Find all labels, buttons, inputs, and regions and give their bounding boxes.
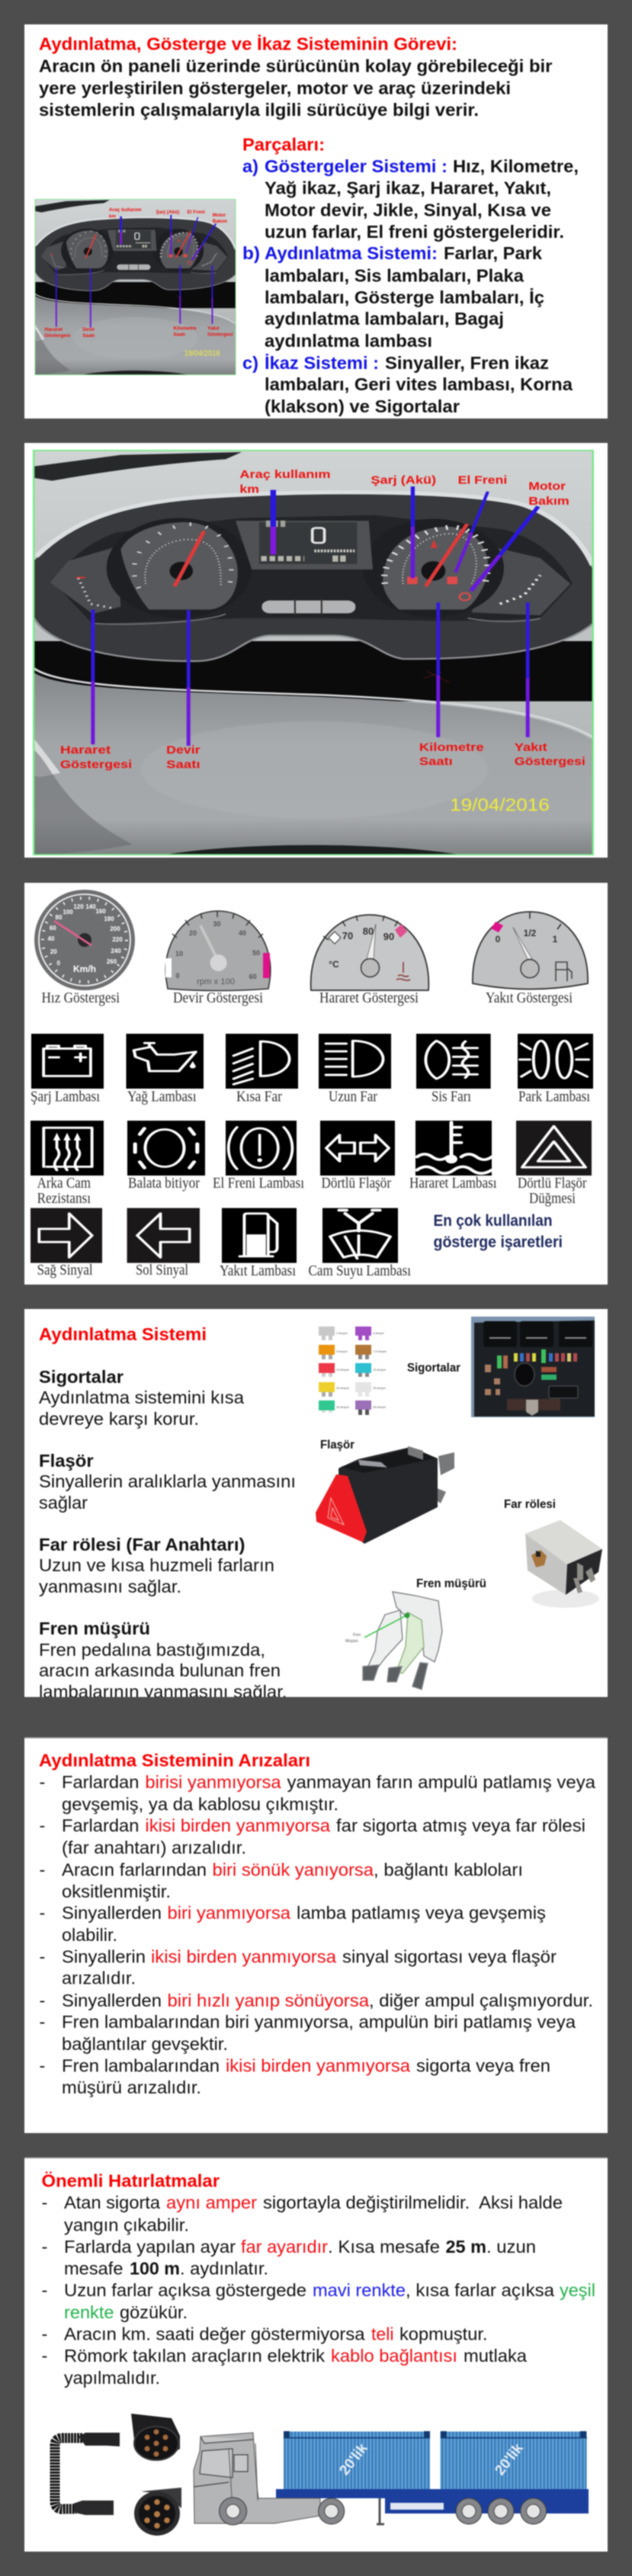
gauge: fuel: 1/2	[524, 928, 537, 938]
list: faults: Sinyallerin	[62, 1946, 146, 1966]
panel: system purpose and parts	[24, 24, 608, 419]
list: faults: , diğer ampul çalışmıyordur.	[369, 1991, 593, 2010]
list: faults: ikisi birden yanmıyorsa	[226, 2056, 411, 2076]
labels: lower callouts: Hararet	[60, 743, 111, 756]
container labels: 20'lik	[336, 2440, 371, 2478]
gauge: speedometer: 80	[56, 914, 63, 921]
image: fuse box	[471, 1317, 595, 1417]
list: faults: biri hızlı yanıp sönüyorsa	[168, 1991, 370, 2010]
list: reminders: kablo bağlantısı	[331, 2346, 457, 2366]
row 2 captions: Düğmesi	[529, 1190, 576, 1207]
text block: flasher: Flaşör	[39, 1451, 94, 1471]
text block: headlight relay: Far rölesi (Far Anahtarı)	[39, 1535, 245, 1554]
text block: brake switch: Fren müşürü	[39, 1618, 150, 1638]
gauge: temperature: 90	[383, 931, 394, 942]
text block: parts a: Yağ ikaz, Şarj ikaz, Hararet, Yakıt,	[265, 178, 551, 198]
row 2 captions: Arka Cam	[37, 1175, 91, 1192]
text block: brake switch	[39, 1618, 287, 1702]
list: reminders: . aydınlatır.	[180, 2259, 268, 2279]
list: faults: birisi yanmıyorsa	[145, 1772, 282, 1792]
row 1 captions: Kısa Far	[236, 1089, 282, 1105]
list: faults: Sinyallerden	[62, 1903, 162, 1923]
gauge: speedometer	[34, 890, 135, 990]
gauge captions: Hız Göstergesi	[41, 990, 120, 1006]
list: reminders: Farlarda yapılan ayar	[64, 2237, 236, 2257]
list: reminders: aynı amper	[166, 2193, 257, 2212]
gauge: fuel: 1	[553, 934, 558, 945]
icon: washer fluid	[322, 1208, 398, 1263]
list: reminders: mutlaka	[464, 2346, 528, 2366]
text block: headlight relay	[39, 1535, 274, 1596]
list: reminders: mavi renkte	[313, 2280, 406, 2300]
list: faults: arızalıdır.	[62, 1968, 136, 1988]
list: faults: -	[40, 1903, 45, 1923]
image: fuse chart: 7,5 Amper	[373, 1349, 387, 1353]
gauge: tachometer: rpm x 100	[197, 977, 235, 986]
panel: lighting system	[24, 1309, 608, 1702]
gauge: speedometer: 20	[50, 948, 57, 955]
row 1 captions	[30, 1089, 590, 1105]
text block: headlight relay: Uzun ve kısa huzmeli farların	[39, 1555, 274, 1575]
gauge: speedometer: 200	[110, 925, 120, 932]
gauge: tachometer: 0	[175, 972, 180, 980]
dashboard photo with labels	[33, 450, 594, 855]
list: reminders: yapılmalıdır.	[64, 2368, 160, 2388]
image: container truck	[194, 2431, 589, 2525]
row 3 captions: Sol Sinyal	[136, 1262, 188, 1278]
list: faults: ikisi birden yanmıyorsa	[145, 1816, 331, 1836]
labels: upper callouts	[239, 467, 569, 507]
row 2 captions: Rezistansı	[37, 1190, 91, 1207]
icon: hazard triangle	[516, 1121, 592, 1176]
heading: parts: Parçaları:	[242, 134, 325, 154]
row 3 captions: Sağ Sinyal	[37, 1262, 93, 1278]
list: reminders: mesafe	[64, 2259, 124, 2279]
image: hazard flasher switch	[316, 1446, 454, 1544]
list: faults: -	[40, 1816, 45, 1836]
list: reminders: Atan sigorta	[64, 2193, 161, 2212]
icon: hazard arrows	[320, 1121, 395, 1176]
small dashboard photo: Şarj (Akü)	[156, 210, 179, 215]
text block: brake switch: Fren pedalına bastığımızda,	[39, 1640, 265, 1660]
gauge: speedometer: 60	[50, 925, 56, 932]
small dashboard photo: Araç kullanım	[109, 207, 142, 213]
gauge: speedometer: 260	[107, 958, 117, 965]
row 2 captions: Dörtlü Flaşör	[518, 1175, 587, 1192]
text block: fuses: devreye karşı korur.	[39, 1409, 199, 1429]
row 2 captions: Dörtlü Flaşör	[322, 1175, 391, 1192]
list: reminders: yangın çıkabilir.	[64, 2215, 189, 2235]
list: reminders: yeşil	[560, 2280, 595, 2300]
text block: parts b: b)	[242, 243, 260, 263]
gauge: speedometer: Km/h	[73, 964, 96, 974]
image: fuse chart: 2 Amper	[336, 1331, 348, 1335]
heading: reminders: Önemli Hatırlatmalar	[41, 2171, 220, 2191]
icon: right turn signal	[30, 1208, 102, 1263]
image: pedal assembly: Fren	[353, 1633, 361, 1638]
photo date stamp: 19/04/2016	[450, 795, 550, 815]
text block: fuses	[39, 1367, 245, 1429]
small dashboard photo: 19/04/2016	[184, 349, 220, 358]
gauge captions: Devir Göstergesi	[173, 990, 263, 1006]
text block: parts c: İkaz Sistemi :	[265, 353, 379, 373]
gauge: speedometer: 220	[112, 936, 123, 943]
list: faults: ikisi birden yanmıyorsa	[151, 1946, 337, 1966]
gauge: speedometer: 160	[95, 908, 106, 915]
row 1 captions: Yağ Lambası	[127, 1089, 197, 1105]
gauge: tachometer: 30	[213, 920, 221, 928]
image: coiled trailer cable	[55, 2433, 120, 2515]
text block: parts a: Göstergeler Sistemi :	[265, 156, 448, 176]
row 3 captions: Yakıt Lambası	[220, 1262, 296, 1279]
list: faults: -	[40, 2012, 45, 2032]
icon: parking brake	[226, 1121, 297, 1176]
icon: left turn signal	[127, 1208, 200, 1263]
row 3 captions	[37, 1262, 411, 1279]
list: reminders: teli	[371, 2324, 393, 2343]
list: faults: -	[40, 1772, 45, 1792]
labels: lower callouts: Saatı	[166, 757, 201, 771]
small dashboard photo: Hararet	[44, 327, 63, 332]
gauge: tachometer: 20	[189, 929, 197, 937]
small dashboard photo: Saatı	[173, 332, 185, 337]
list: reminders: Römork takılan araçların elektrik	[64, 2346, 325, 2366]
icon: fuel pump	[222, 1208, 297, 1263]
text block: parts b: Farlar, Park	[444, 243, 543, 263]
labels: upper callouts: El Freni	[458, 473, 507, 486]
row 1 captions: Uzun Far	[329, 1089, 377, 1105]
icon: coolant temperature	[415, 1121, 492, 1176]
list: reminders: , kısa farlar açıksa	[406, 2280, 555, 2300]
small dashboard photo: Bakım	[213, 220, 227, 224]
small dashboard photo: Devir	[82, 327, 95, 332]
text block: parts c: (klakson) ve Sigortalar	[265, 396, 460, 416]
small dashboard photo: Motor	[213, 213, 226, 218]
text block: parts a: uzun farlar, El freni göstergeleridir.	[265, 222, 564, 242]
list: reminders: -	[41, 2346, 47, 2366]
gauge: temperature: °C	[329, 959, 339, 970]
gauge: speedometer: 0	[56, 960, 60, 967]
labels: lower callouts: Yakıt	[515, 740, 547, 753]
row 2 captions	[37, 1175, 587, 1207]
gauge: fuel: 0	[496, 934, 501, 945]
panel: large dashboard photo	[24, 443, 608, 858]
list: faults: müşürü arızalıdır.	[62, 2077, 201, 2097]
small dashboard photo: Saatı	[82, 334, 95, 338]
list: faults: Sinyallerden	[62, 1991, 162, 2010]
text block: headlight relay: yanmasını sağlar.	[39, 1577, 181, 1596]
row 1 captions: Park Lambası	[518, 1089, 590, 1105]
list: faults: sinyal sigortası veya flaşör	[342, 1946, 557, 1966]
list: reminders: 100 m	[130, 2259, 180, 2279]
gauge captions: Yakıt Göstergesi	[486, 990, 573, 1006]
callout: most used indicators: gösterge işaretleri	[433, 1233, 563, 1251]
image: socket top	[131, 2414, 180, 2460]
gauge captions	[41, 990, 573, 1006]
label: flasher: Flaşör	[320, 1439, 354, 1452]
small dashboard photo	[35, 199, 236, 375]
labels: lower callouts: Göstergesi	[515, 755, 585, 768]
list: faults: -	[40, 2056, 45, 2076]
container labels: 20'lik	[492, 2440, 527, 2478]
image: fuse chart: 35 Amper	[373, 1405, 387, 1409]
text block: system description: sistemlerin çalışmalarıyla ilgili sürücüye bilgi verir.	[39, 100, 479, 120]
image: fuse chart: 20 Amper	[336, 1386, 350, 1390]
text block: system description	[39, 56, 552, 120]
gauge: tachometer: 60	[249, 973, 257, 980]
text block: parts b: lambaları, Sis lambaları, Plaka	[265, 265, 525, 285]
list: reminders: -	[41, 2324, 47, 2343]
small dashboard photo: Kilometre	[173, 326, 197, 331]
list: faults: -	[40, 1946, 45, 1966]
list: faults: Farlardan	[62, 1816, 139, 1836]
list: reminders: far ayarıdır	[241, 2237, 328, 2257]
text block: parts a	[242, 156, 579, 242]
text block: parts c: lambaları, Geri vites lambası, Korna	[265, 374, 573, 394]
list: faults: oksitlenmiştir.	[62, 1881, 171, 1901]
list: faults: Fren lambalarından	[62, 2056, 220, 2076]
icon: oil	[127, 1034, 204, 1089]
list: faults: -	[40, 1991, 45, 2010]
image: pedal assembly	[345, 1592, 442, 1689]
small dashboard photo: Göstergesi	[207, 332, 233, 337]
gauge: temperature: 80	[363, 925, 374, 937]
list: reminders: sigortayla değiştirilmelidir. Aksi halde	[263, 2193, 563, 2212]
gauge: tachometer: 10	[175, 950, 183, 958]
list: faults: Fren lambalarından biri yanmıyorsa, ampulün biri patlamış veya	[62, 2012, 576, 2032]
small dashboard photo: Yakıt	[207, 326, 220, 331]
list: faults: -	[40, 1860, 45, 1880]
image: fuse chart	[319, 1326, 387, 1415]
labels: lower callouts: Göstergesi	[60, 757, 132, 771]
icon: low beam	[226, 1034, 298, 1089]
label: fuses: Sigortalar	[407, 1362, 460, 1375]
labels: lower callouts	[60, 740, 585, 771]
callout: most used indicators	[433, 1212, 563, 1251]
text block: parts a: Hız, Kilometre,	[453, 156, 579, 176]
list: faults: biri sönük yanıyorsa	[212, 1860, 374, 1880]
text block: parts b: aydınlatma lambası	[265, 331, 432, 351]
text block: fuses: Sigortalar	[39, 1367, 124, 1387]
text block: flasher	[39, 1451, 296, 1513]
icon: parking lights	[518, 1034, 593, 1089]
gauge: speedometer: 180	[104, 916, 114, 922]
labels: lower callouts: Kilometre	[419, 740, 484, 753]
image: relay	[525, 1520, 602, 1608]
list: reminders: . Kısa mesafe	[328, 2237, 440, 2257]
gauge: tachometer: 40	[239, 929, 246, 937]
list: faults: (far anahtarı) arızalıdır.	[62, 1837, 246, 1857]
text block: system description: Aracın ön paneli üzerinde sürücünün kolay görebileceği bir	[39, 56, 552, 76]
text block: parts c: c)	[242, 353, 258, 373]
labels: upper callouts: km	[239, 482, 259, 496]
text block: parts a: a)	[242, 156, 258, 176]
gauge: speedometer: 100	[63, 909, 73, 916]
gauge captions: Hararet Göstergesi	[319, 990, 419, 1006]
label: brake switch: Fren müşürü	[416, 1577, 486, 1590]
text block: fuses: Aydınlatma sistemini kısa	[39, 1387, 245, 1407]
text block: system description: yere yerleştirilen göstergeler, motor ve araç üzerindeki	[39, 79, 511, 98]
image: pedal assembly: Müşürü	[345, 1639, 358, 1644]
labels: upper callouts: Araç kullanım	[239, 467, 330, 480]
text block: parts a: Motor devir, Jikle, Sinyal, Kısa ve	[265, 200, 551, 220]
list: reminders: -	[41, 2237, 47, 2257]
list: faults: olabilir.	[62, 1925, 117, 1945]
list: faults: far sigorta atmış veya far rölesi	[336, 1816, 585, 1836]
small dashboard photo: km	[109, 214, 116, 219]
labels: upper callouts: Bakım	[528, 494, 569, 507]
gauge: speedometer: 140	[85, 903, 96, 910]
row 3 captions: Cam Suyu Lambası	[308, 1262, 411, 1279]
list: faults: sigorta veya fren	[416, 2056, 550, 2076]
panel: lighting system faults	[24, 1737, 608, 2133]
list: faults: Aracın farlarından	[62, 1860, 207, 1880]
list: reminders: -	[41, 2280, 47, 2300]
icon: rear defrost	[30, 1121, 104, 1176]
text block: parts c: Sinyaller, Fren ikaz	[385, 353, 549, 373]
list: reminders	[41, 2193, 595, 2388]
list: faults: lamba patlamış veya gevşemiş	[297, 1903, 546, 1923]
gauge: speedometer: 240	[111, 948, 121, 954]
image: fuse chart: 3 Amper	[373, 1331, 385, 1335]
text block: brake switch: lambalarının yanmasını sağlar.	[39, 1682, 287, 1702]
list: reminders: 25 m	[445, 2237, 486, 2257]
list: faults: Farlardan	[62, 1772, 139, 1792]
text block: parts c	[242, 353, 573, 416]
image: fuse chart: 10 Amper	[336, 1368, 350, 1371]
list: faults: , bağlantı kabloları	[374, 1860, 523, 1880]
gauge: tachometer	[165, 911, 271, 991]
list: reminders: Aracın km. saati değer göstermiyorsa	[64, 2324, 365, 2343]
list: faults: yanmayan farın ampulü patlamış veya	[287, 1772, 596, 1792]
heading: lighting system: Aydınlatma Sistemi	[39, 1324, 207, 1344]
image: fuse chart: 5 Amper	[336, 1349, 348, 1353]
gauge: temperature	[311, 915, 428, 990]
list: reminders: -	[41, 2193, 47, 2212]
label: headlight relay: Far rölesi	[504, 1498, 556, 1511]
text block: parts b: Aydınlatma Sistemi:	[265, 243, 438, 263]
labels: upper callouts: Motor	[528, 480, 566, 492]
heading: faults: Aydınlatma Sisteminin Arızaları	[39, 1750, 310, 1770]
list: faults: gevşemiş, ya da kablosu çıkmıştır.	[62, 1794, 338, 1814]
panel: important reminders	[24, 2157, 608, 2552]
image: fuse chart: 30 Amper	[336, 1405, 350, 1409]
list: reminders: Uzun farlar açıksa göstergede	[64, 2280, 306, 2300]
callout: most used indicators: En çok kullanılan	[433, 1212, 552, 1230]
small dashboard photo: Göstergesi	[44, 334, 70, 338]
text block: parts b: aydınlatma lambaları, Bagaj	[265, 309, 504, 329]
icon: fog lamp	[416, 1034, 491, 1089]
labels: upper callouts: Şarj (Akü)	[371, 473, 436, 486]
icon: high beam	[319, 1034, 391, 1089]
gauge: tachometer: 50	[252, 949, 260, 957]
text block: parts b: lambaları, Gösterge lambaları, İç	[265, 287, 544, 307]
list: faults	[40, 1772, 596, 2097]
text block: brake switch: aracın arkasında bulunan fren	[39, 1660, 281, 1680]
image: fuse chart: 25 Amper	[373, 1386, 387, 1390]
heading: system purpose: Aydınlatma, Gösterge ve İkaz Sisteminin Görevi:	[39, 34, 457, 53]
labels: lower callouts: Saatı	[419, 755, 453, 768]
list: faults: bağlantılar gevşektir.	[62, 2034, 228, 2054]
text block: flasher: sağlar	[39, 1493, 88, 1513]
list: reminders: gözükür.	[120, 2302, 188, 2322]
gauge: temperature: 70	[342, 930, 353, 942]
gauge: speedometer: 120	[73, 903, 84, 910]
container labels	[336, 2440, 527, 2478]
row 2 captions: Balata bitiyor	[128, 1175, 200, 1192]
text block: parts b	[242, 243, 544, 351]
row 2 captions: Hararet Lambası	[409, 1175, 497, 1192]
icon: brake pads	[127, 1121, 205, 1176]
list: faults: biri yanmıyorsa	[168, 1903, 291, 1923]
row 2 captions: El Freni Lambası	[213, 1175, 304, 1192]
list: reminders: kopmuştur.	[399, 2324, 488, 2343]
row 1 captions: Şarj Lambası	[30, 1089, 100, 1105]
image: fuse chart: 15 Amper	[373, 1368, 387, 1371]
icon: battery	[31, 1034, 104, 1089]
labels: lower callouts: Devir	[166, 743, 201, 756]
list: reminders: . uzun	[486, 2237, 536, 2257]
small dashboard photo: El Freni	[188, 210, 205, 215]
gauge: speedometer: 40	[48, 935, 55, 942]
gauge: fuel	[473, 912, 588, 990]
text block: flasher: Sinyallerin aralıklarla yanmasını	[39, 1471, 296, 1491]
panel: gauges and warning symbols	[24, 883, 608, 1285]
image: socket bottom	[134, 2488, 181, 2536]
list: reminders: renkte	[64, 2302, 114, 2322]
row 1 captions: Sis Farı	[431, 1089, 471, 1105]
